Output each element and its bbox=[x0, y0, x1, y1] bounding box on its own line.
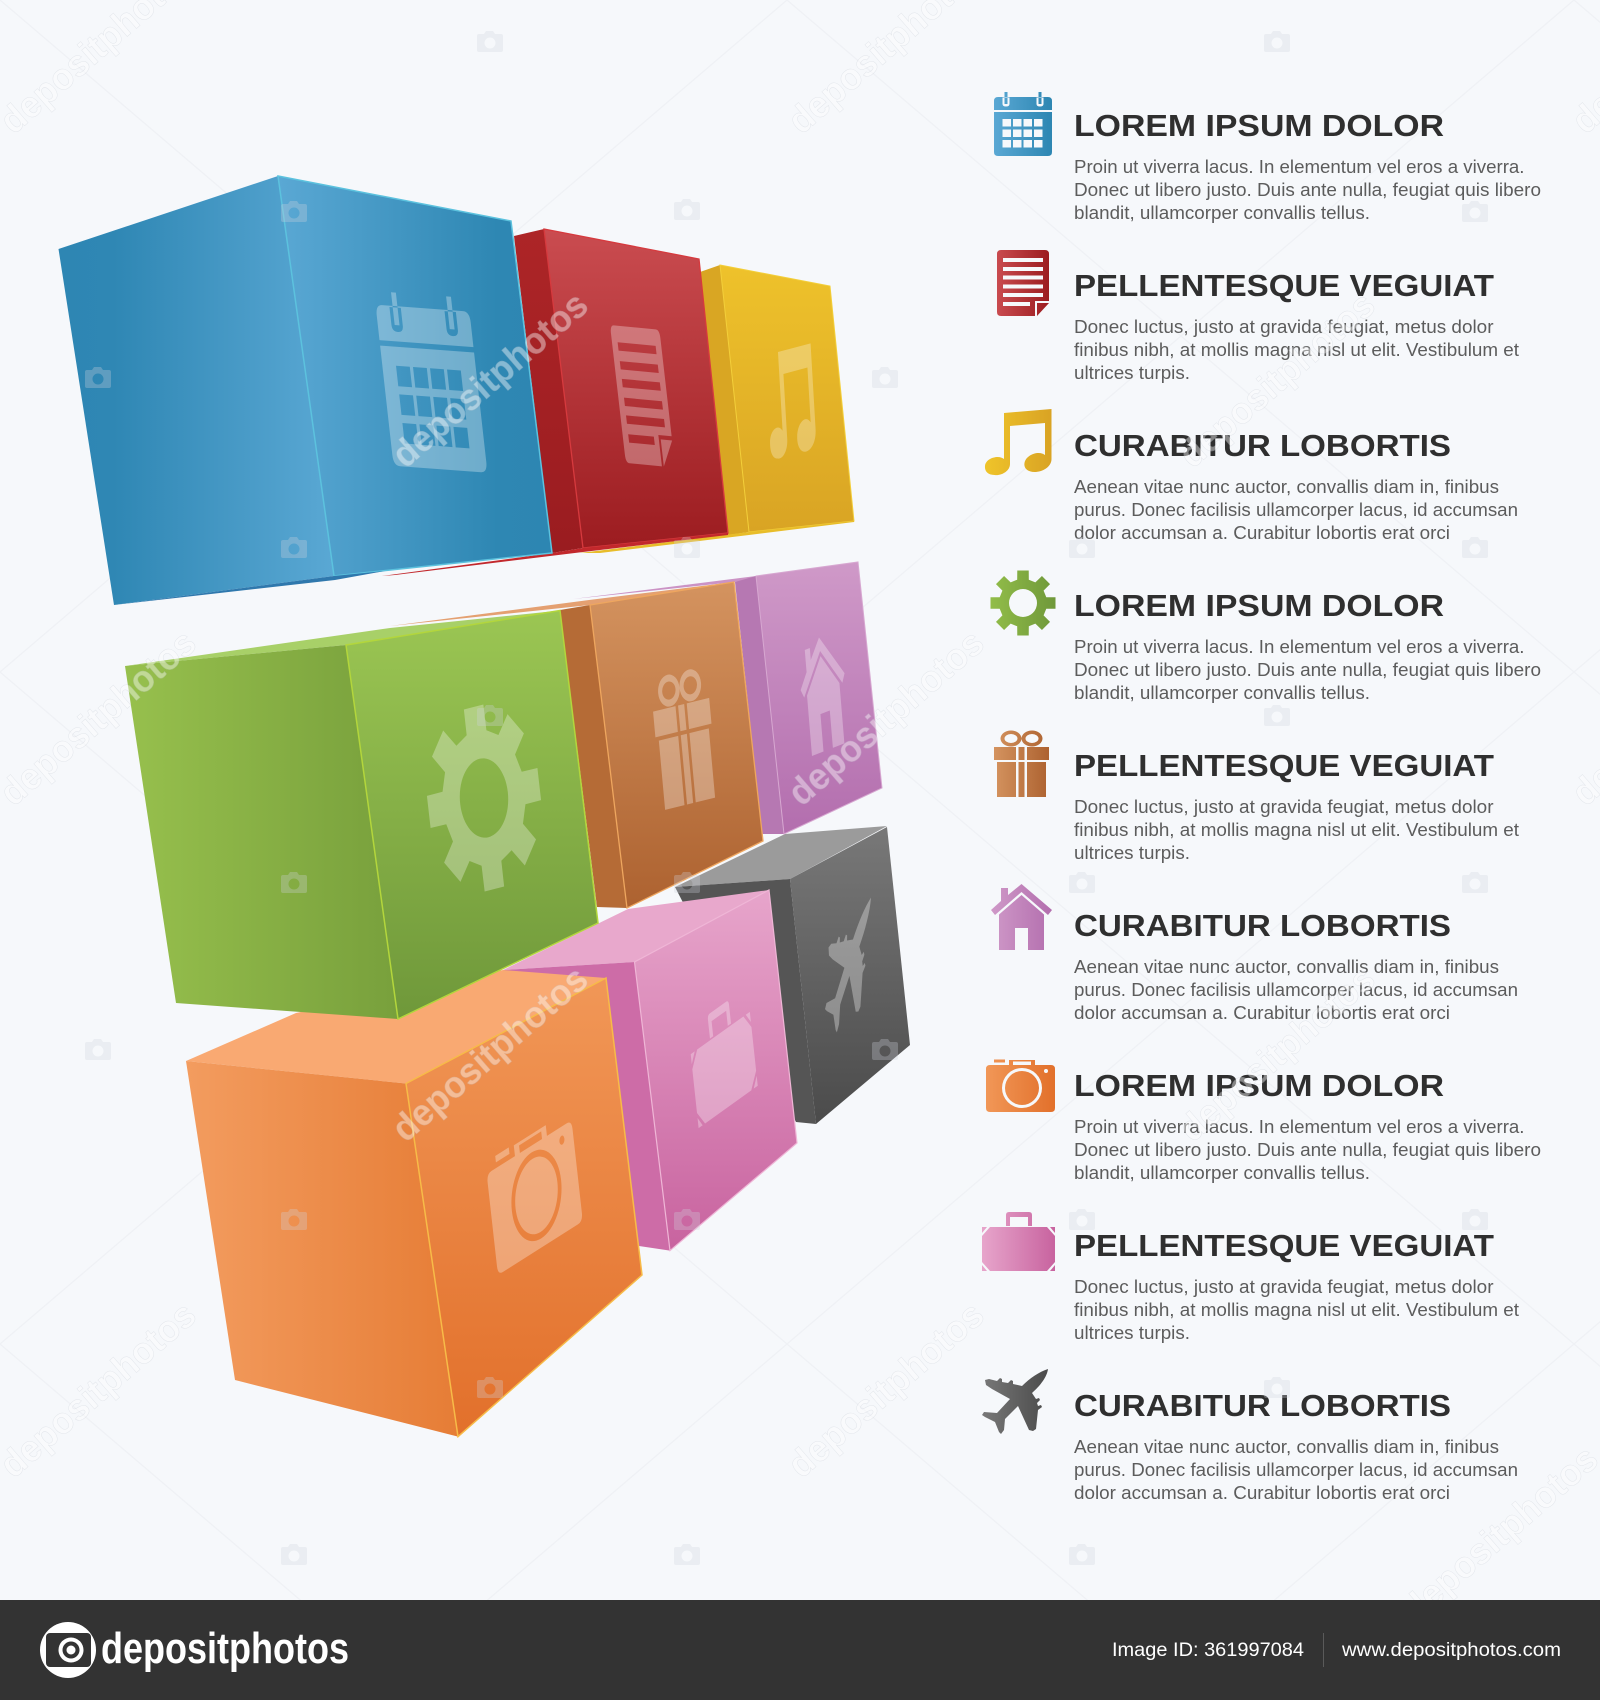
heading 8: PELLENTESQUE VEGUIAT bbox=[1074, 1228, 1494, 1263]
text block 3: Aenean vitae nunc auctor, convallis diam in, finibus bbox=[1074, 476, 1499, 497]
icon: gear bbox=[990, 570, 1056, 636]
watermarks: depositphotos text: depositphotos bbox=[780, 622, 992, 813]
icon: suitcase bbox=[982, 1212, 1055, 1271]
website url: www.depositphotos.com bbox=[1341, 1639, 1561, 1661]
icon: gift bbox=[994, 730, 1049, 797]
watermarks: depositphotos text: depositphotos bbox=[384, 284, 596, 475]
cube: blue calendar bbox=[58, 176, 552, 605]
text block 2: finibus nibh, at mollis magna nisl ut elit. Vestibulum et bbox=[1074, 339, 1519, 360]
icon: document on cube bbox=[610, 325, 675, 468]
text block 1: Proin ut viverra lacus. In elementum vel eros a viverra. bbox=[1074, 156, 1524, 177]
icon: suitcase on cube bbox=[688, 987, 758, 1128]
cube: orange camera bbox=[186, 970, 642, 1437]
text block 9: Aenean vitae nunc auctor, convallis diam in, finibus bbox=[1074, 1436, 1499, 1457]
heading 5: PELLENTESQUE VEGUIAT bbox=[1074, 748, 1494, 783]
footer bar bbox=[0, 1600, 1600, 1700]
icon: gift on cube bbox=[650, 665, 718, 811]
text block 6: purus. Donec facilisis ullamcorper lacus, id accumsan bbox=[1074, 979, 1518, 1000]
text block 6: Aenean vitae nunc auctor, convallis diam in, finibus bbox=[1074, 956, 1499, 977]
cube: pink suitcase bbox=[503, 890, 797, 1251]
heading 6: CURABITUR LOBORTIS bbox=[1074, 908, 1451, 943]
text block 7: Donec ut libero justo. Duis ante nulla, feugiat quis libero bbox=[1074, 1139, 1541, 1160]
heading 3: CURABITUR LOBORTIS bbox=[1074, 428, 1451, 463]
item 1: lorem ipsum dolor bbox=[994, 92, 1541, 223]
text block 1: Donec ut libero justo. Duis ante nulla, feugiat quis libero bbox=[1074, 179, 1541, 200]
item 2: pellentesque veguiat bbox=[997, 250, 1519, 383]
item 9: curabitur lobortis bbox=[982, 1369, 1518, 1503]
text block 5: finibus nibh, at mollis magna nisl ut elit. Vestibulum et bbox=[1074, 819, 1519, 840]
icon: calendar bbox=[994, 92, 1052, 156]
icon: camera bbox=[986, 1060, 1055, 1112]
text block 8: ultrices turpis. bbox=[1074, 1322, 1190, 1343]
cube: grey plane bbox=[675, 826, 910, 1124]
text block 5: ultrices turpis. bbox=[1074, 842, 1190, 863]
icon: house on cube bbox=[797, 629, 850, 758]
footer logo icon bbox=[40, 1622, 96, 1678]
text block 3: purus. Donec facilisis ullamcorper lacus, id accumsan bbox=[1074, 499, 1518, 520]
cube: brown gift bbox=[390, 582, 763, 908]
icon: camera on cube bbox=[485, 1108, 583, 1275]
text block 8: Donec luctus, justo at gravida feugiat, metus dolor bbox=[1074, 1276, 1494, 1297]
cube: red document bbox=[382, 229, 728, 576]
image id: Image ID: 361997084 bbox=[1112, 1639, 1304, 1661]
item 6: curabitur lobortis bbox=[991, 884, 1518, 1023]
text block 4: Donec ut libero justo. Duis ante nulla, feugiat quis libero bbox=[1074, 659, 1541, 680]
cube: yellow music bbox=[580, 265, 854, 553]
watermarks: depositphotos text: depositphotos bbox=[384, 958, 596, 1149]
text block 5: Donec luctus, justo at gravida feugiat, metus dolor bbox=[1074, 796, 1494, 817]
watermarks: small cameras bbox=[85, 31, 1488, 1565]
icon: music note on cube bbox=[764, 343, 817, 459]
heading 4: LOREM IPSUM DOLOR bbox=[1074, 588, 1444, 623]
text block 9: purus. Donec facilisis ullamcorper lacus, id accumsan bbox=[1074, 1459, 1518, 1480]
item 4: lorem ipsum dolor bbox=[990, 570, 1541, 703]
watermarks: depositphotos text: depositphotos bbox=[1171, 284, 1383, 475]
text block 7: blandit, ullamcorper convallis tellus. bbox=[1074, 1162, 1370, 1183]
icon: music note bbox=[985, 409, 1052, 475]
item 3: curabitur lobortis bbox=[985, 409, 1518, 543]
footer logo wordmark: depositphotos bbox=[101, 1624, 349, 1673]
text block 4: blandit, ullamcorper convallis tellus. bbox=[1074, 682, 1370, 703]
item 7: lorem ipsum dolor bbox=[986, 1060, 1541, 1183]
text block 4: Proin ut viverra lacus. In elementum vel eros a viverra. bbox=[1074, 636, 1524, 657]
icon: plane on cube bbox=[824, 897, 871, 1042]
icon: gear on cube bbox=[418, 693, 550, 903]
icon: plane bbox=[982, 1369, 1048, 1434]
text block 1: blandit, ullamcorper convallis tellus. bbox=[1074, 202, 1370, 223]
text block 6: dolor accumsan a. Curabitur lobortis erat orci bbox=[1074, 1002, 1450, 1023]
item 5: pellentesque veguiat bbox=[994, 730, 1519, 863]
watermarks: depositphotos text: depositphotos bbox=[1171, 958, 1383, 1149]
text block 2: ultrices turpis. bbox=[1074, 362, 1190, 383]
panel: stacked cubes bbox=[58, 176, 910, 1437]
text block 2: Donec luctus, justo at gravida feugiat, metus dolor bbox=[1074, 316, 1494, 337]
item 8: pellentesque veguiat bbox=[982, 1212, 1519, 1343]
text block 7: Proin ut viverra lacus. In elementum vel eros a viverra. bbox=[1074, 1116, 1524, 1137]
icon: document bbox=[997, 250, 1049, 316]
cube: green gear bbox=[125, 610, 598, 1019]
heading 9: CURABITUR LOBORTIS bbox=[1074, 1388, 1451, 1423]
heading 2: PELLENTESQUE VEGUIAT bbox=[1074, 268, 1494, 303]
icon: house bbox=[991, 884, 1052, 950]
cube: purple house bbox=[573, 562, 882, 834]
watermarks: depositphotos text: depositphotos bbox=[780, 1294, 992, 1485]
text block 9: dolor accumsan a. Curabitur lobortis erat orci bbox=[1074, 1482, 1450, 1503]
heading 1: LOREM IPSUM DOLOR bbox=[1074, 108, 1444, 143]
text block 8: finibus nibh, at mollis magna nisl ut elit. Vestibulum et bbox=[1074, 1299, 1519, 1320]
icon: calendar on cube bbox=[374, 291, 487, 473]
text block 3: dolor accumsan a. Curabitur lobortis erat orci bbox=[1074, 522, 1450, 543]
heading 7: LOREM IPSUM DOLOR bbox=[1074, 1068, 1444, 1103]
